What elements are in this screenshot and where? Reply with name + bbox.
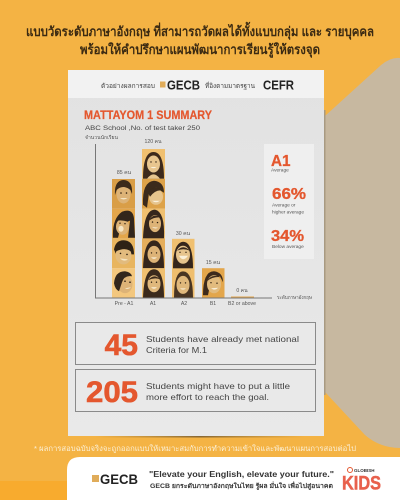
Globish Kids logo: KIDS bbox=[342, 472, 381, 494]
footer panel bbox=[67, 457, 400, 500]
column A1: 120 คน bbox=[144, 139, 162, 145]
stats panel: 34% bbox=[271, 228, 304, 245]
title: พร้อมให้คำปรึกษาแผนพัฒนาการเรียนรู้ให้ตรงจุด bbox=[80, 41, 320, 58]
column Pre-A1: 85 คน bbox=[117, 170, 132, 176]
column A2: 30 คน bbox=[176, 231, 191, 237]
column B1 bbox=[202, 260, 224, 298]
GECB logo: GECB bbox=[100, 472, 138, 487]
callout: 205 students: 205 bbox=[86, 376, 138, 409]
stats panel: higher average bbox=[272, 210, 304, 216]
stats panel: 66% bbox=[272, 186, 306, 203]
column Pre-A1 bbox=[112, 170, 135, 298]
report header strip bbox=[68, 70, 324, 98]
stats panel: Average or bbox=[272, 202, 296, 208]
report header strip: CEFR bbox=[263, 78, 295, 92]
x axis labels bbox=[115, 301, 256, 307]
taupe background shape bbox=[325, 58, 400, 448]
callout: 205 students: Students might have to put a little bbox=[146, 381, 290, 391]
x axis labels: A2 bbox=[181, 301, 187, 307]
callout: 205 students: more effort to reach the goal. bbox=[146, 392, 269, 402]
x axis labels: B2 or above bbox=[228, 301, 256, 307]
report header strip: ตัวอย่างผลการสอบ bbox=[101, 82, 155, 90]
report card bbox=[68, 70, 324, 436]
column A1 bbox=[142, 139, 165, 298]
bar chart bbox=[85, 134, 313, 307]
callout: 45 students bbox=[76, 322, 316, 364]
Globish Kids logo: GLOBISH bbox=[354, 468, 375, 473]
footnote: * ผลการสอบฉบับจริงจะถูกออกแบบให้เหมาะสมกับการทำความเข้าใจและพัฒนาแผนการสอบต่อไป bbox=[34, 444, 356, 453]
y axis label: จำนวนนักเรียน bbox=[85, 134, 119, 141]
x axis title: ระดับภาษาอังกฤษ bbox=[277, 295, 313, 301]
slogan: "Elevate your English, elevate your future." bbox=[149, 470, 334, 479]
school subheading: ABC School ,No. of test taker 250 bbox=[85, 125, 200, 132]
x axis labels: Pre - A1 bbox=[115, 301, 133, 307]
x axis labels: B1 bbox=[210, 301, 216, 307]
report header strip: ที่อิงตามมาตรฐาน bbox=[205, 81, 256, 90]
summary heading: MATTAYOM 1 SUMMARY bbox=[84, 110, 212, 122]
report header strip: GECB bbox=[167, 78, 200, 92]
column B2 or above: 0 คน bbox=[236, 288, 248, 294]
column B1: 15 คน bbox=[206, 260, 221, 266]
stats panel: A1 bbox=[271, 153, 291, 170]
title bbox=[26, 21, 374, 58]
slogan thai: GECB ยกระดับภาษาอังกฤษในไทย รู้ผล มั่นใจ เพื่อไปสู่อนาคต bbox=[150, 481, 333, 491]
callout: 45 students: 45 bbox=[105, 329, 138, 362]
stats panel: Average bbox=[271, 168, 289, 174]
callout: 205 students bbox=[76, 370, 316, 412]
x axis labels: A1 bbox=[150, 301, 156, 307]
column B2 or above bbox=[231, 288, 254, 298]
callout: 45 students: Criteria for M.1 bbox=[146, 345, 207, 355]
column A2 bbox=[172, 231, 194, 298]
stats panel: Below average bbox=[272, 244, 304, 250]
stats panel bbox=[264, 144, 314, 259]
axes bbox=[96, 144, 272, 298]
callout: 45 students: Students have already met national bbox=[146, 334, 299, 344]
